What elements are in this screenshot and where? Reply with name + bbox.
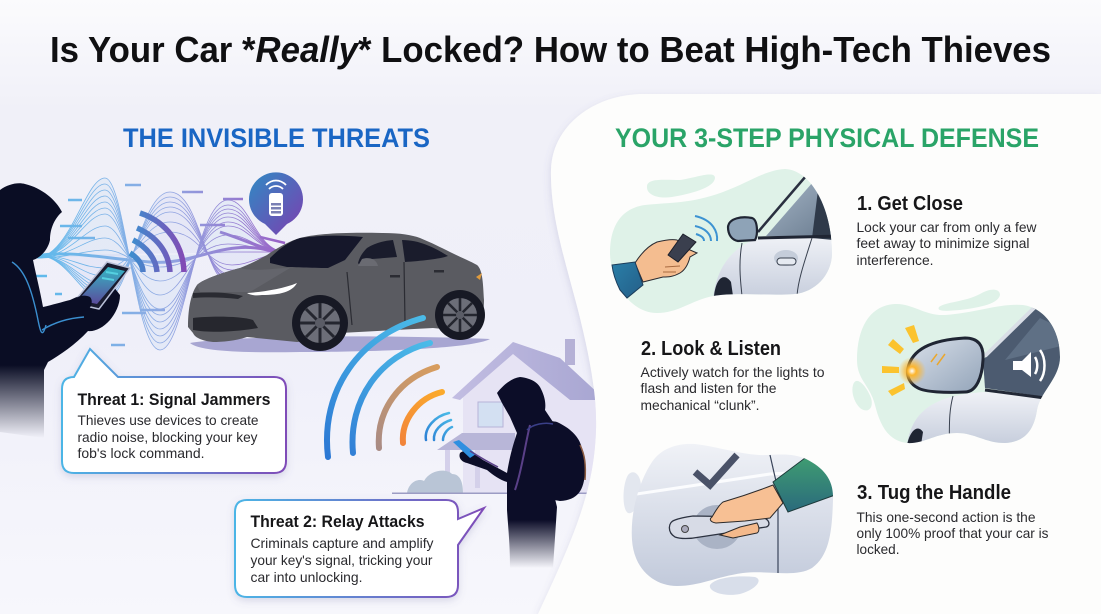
text: threat 2 body: your key's signal, tricking your — [250, 552, 433, 568]
illustration: grey car — [188, 233, 490, 352]
icon: key fob location pin — [249, 172, 303, 235]
callout: threat 2 relay attacks — [235, 500, 484, 597]
panel: right defense background — [538, 94, 1101, 614]
text: threat 1 body — [78, 412, 259, 461]
heading: the invisible threats: THE INVISIBLE THREATS — [123, 123, 430, 153]
text: step 2 look and listen: flash and listen for the — [640, 380, 777, 396]
text: threat 2 body — [250, 535, 434, 585]
text: step 3 tug the handle: 3. Tug the Handle — [857, 482, 1011, 504]
text: threat 2 body: car into unlocking. — [250, 569, 362, 585]
title: Is Your Car *Really* Locked? How to Beat High-Tech Thieves — [50, 29, 1051, 70]
text: step 2 look and listen: Actively watch for the lights to — [640, 364, 825, 380]
text: step 1 get close — [856, 193, 1037, 268]
text: step 3 tug the handle: locked. — [856, 541, 900, 557]
illustration: hooded thief with backpack — [453, 377, 585, 568]
text: threat 1 body: fob's lock command. — [78, 445, 204, 461]
text: step 1 get close: 1. Get Close — [857, 193, 963, 215]
text: step 1 get close: interference. — [856, 252, 934, 268]
text: step 3 tug the handle — [856, 482, 1048, 557]
text: threat 1 body: Thieves use devices to create — [78, 412, 259, 428]
signal arcs from jammer — [130, 213, 184, 272]
illustration: step 3 tug the handle — [624, 444, 840, 595]
text: step 1 get close: Lock your car from only a few — [856, 219, 1037, 235]
heading: your 3-step physical defense: YOUR 3-STEP PHYSICAL DEFENSE — [615, 123, 1039, 153]
signal wave interference graphic — [35, 178, 285, 350]
illustration: hooded thief with phone — [0, 183, 130, 438]
text: step 2 look and listen — [640, 338, 825, 413]
text: step 1 get close: feet away to minimize signal — [856, 235, 1030, 251]
text: step 2 look and listen: 2. Look & Listen — [641, 338, 781, 360]
illustration: house — [392, 339, 600, 494]
text: threat 1 body: radio noise, blocking your key — [78, 429, 258, 445]
text: step 3 tug the handle: only 100% proof that your car is — [856, 525, 1048, 541]
callout: threat 1 signal jammers — [62, 349, 286, 473]
illustration: step 1 get close — [610, 169, 840, 313]
big relay signal arcs — [327, 318, 452, 457]
text: threat 2 heading: Threat 2: Relay Attacks — [250, 512, 424, 531]
text: threat 2 body: Criminals capture and amplify — [250, 535, 434, 551]
text: threat 1 heading: Threat 1: Signal Jammers — [78, 390, 270, 409]
illustration: step 2 mirror flash and sound — [852, 290, 1065, 445]
text: step 2 look and listen: mechanical “clunk”. — [640, 397, 760, 413]
text: step 3 tug the handle: This one-second action is the — [856, 509, 1036, 525]
